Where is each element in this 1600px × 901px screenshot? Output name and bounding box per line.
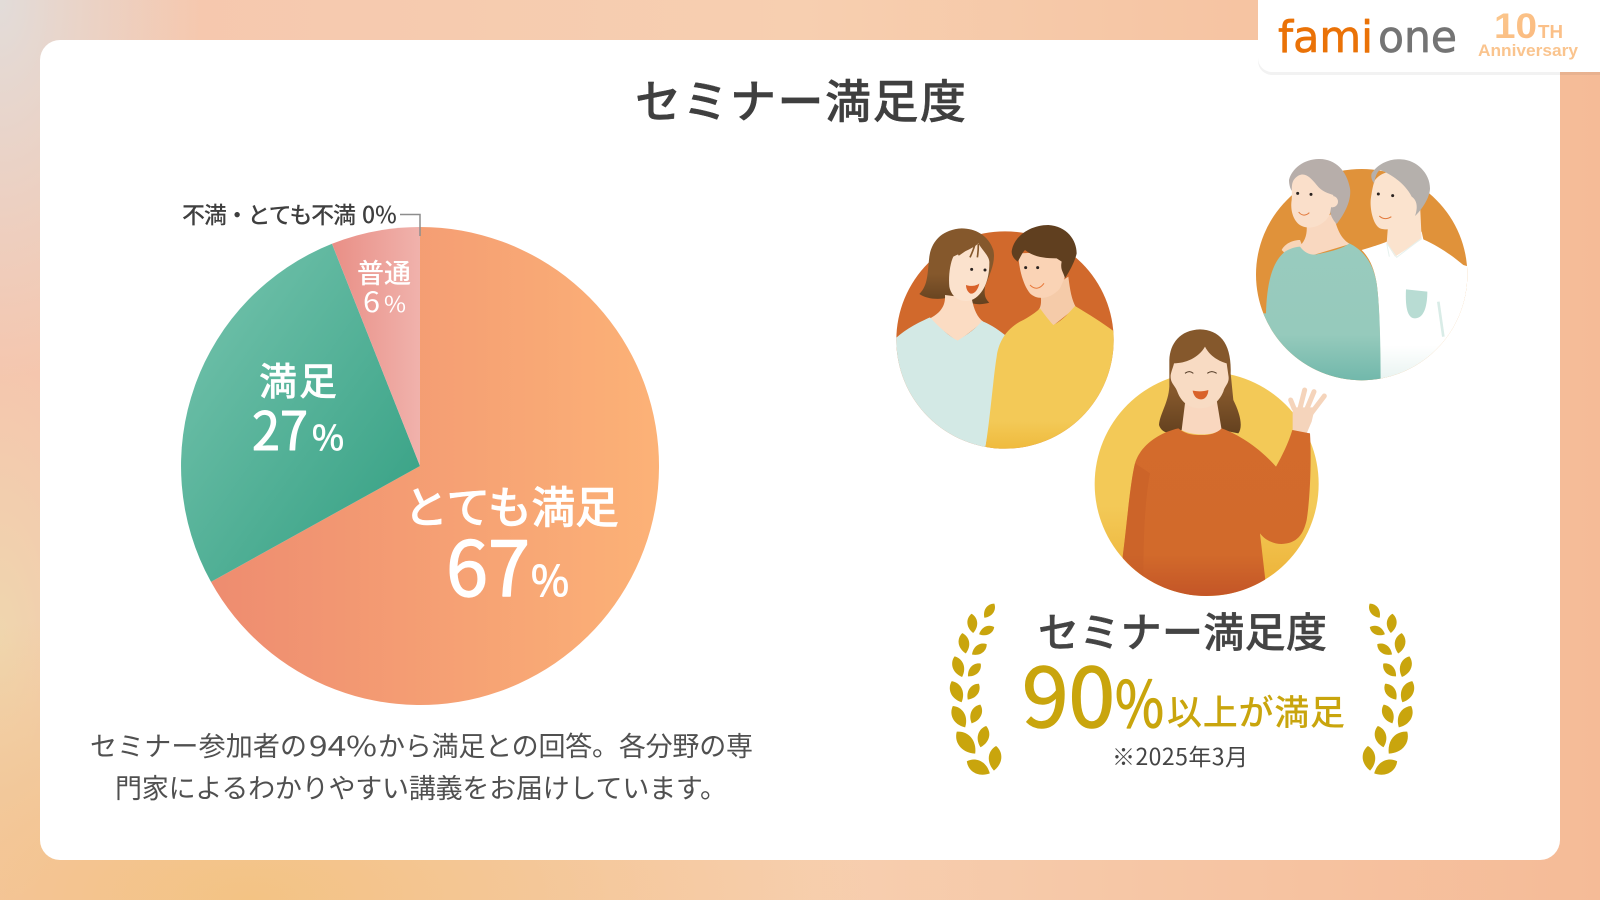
callout: 不満・とても不満 0%: [182, 196, 420, 236]
10th anniversary mark: 10: [1494, 7, 1537, 46]
label: 67%: [446, 508, 569, 618]
slice: 満足 27%: [181, 244, 420, 582]
label: 27%: [252, 390, 344, 466]
slice: とても満足 67%: [211, 227, 659, 705]
summary text block: から満足との回答。各分野の専: [378, 725, 753, 764]
award figure: 90%: 90: [1022, 632, 1115, 751]
award: left laurel: [946, 601, 1002, 779]
slice: 普通 6%: [332, 227, 420, 466]
10th anniversary mark: Anniversary: [1478, 41, 1579, 60]
award note: date: ※2025年3月: [1112, 738, 1248, 772]
pie chart: [181, 227, 659, 705]
woman: [1260, 159, 1381, 383]
label: 普通: 普通: [357, 252, 411, 291]
callout: 不満・とても不満 0%: 0%: [362, 196, 397, 230]
callout: 不満・とても不満 0%: 不満・とても不満: [182, 196, 356, 230]
summary text block: 門家によるわかりやすい講義をお届けしています。: [115, 767, 727, 806]
label: 満足: 満足: [259, 351, 337, 406]
award figure: 90%: %: [1115, 654, 1164, 746]
award figure: 90%: [1022, 632, 1164, 751]
logo panel: [1258, 0, 1600, 75]
label: 6%: 6: [363, 281, 380, 321]
logo wordmark famione: fami: [1278, 12, 1373, 63]
logo wordmark famione: [1278, 12, 1457, 63]
10th anniversary mark: TH: [1538, 22, 1563, 42]
label: 67%: %: [531, 548, 569, 609]
waving hand: [1291, 390, 1324, 433]
label: とても満足: とても満足: [404, 472, 619, 536]
logo wordmark famione: one: [1378, 12, 1457, 63]
man: [985, 225, 1117, 450]
award: right laurel: [1362, 601, 1418, 779]
label: 67%: 67: [446, 508, 530, 618]
woman: [893, 228, 1005, 450]
10th anniversary mark: [1478, 7, 1579, 60]
illustration: young couple: [893, 225, 1117, 450]
man: [1362, 159, 1468, 378]
label: 27%: %: [312, 411, 344, 460]
award heading: セミナー満足度: [1038, 599, 1327, 659]
illustration: waving woman: [1095, 329, 1324, 597]
summary text block: 94%: [309, 725, 377, 764]
illustration: senior couple: [1256, 159, 1480, 383]
label: 6%: [363, 281, 406, 321]
title: セミナー満足度: [635, 66, 966, 132]
summary text block: [90, 725, 753, 806]
award caption: 以上が満足: 以上が満足: [1167, 685, 1345, 736]
label: 6%: %: [384, 287, 406, 319]
summary text block: セミナー参加者の: [90, 725, 307, 764]
label: 27%: 27: [252, 390, 308, 466]
